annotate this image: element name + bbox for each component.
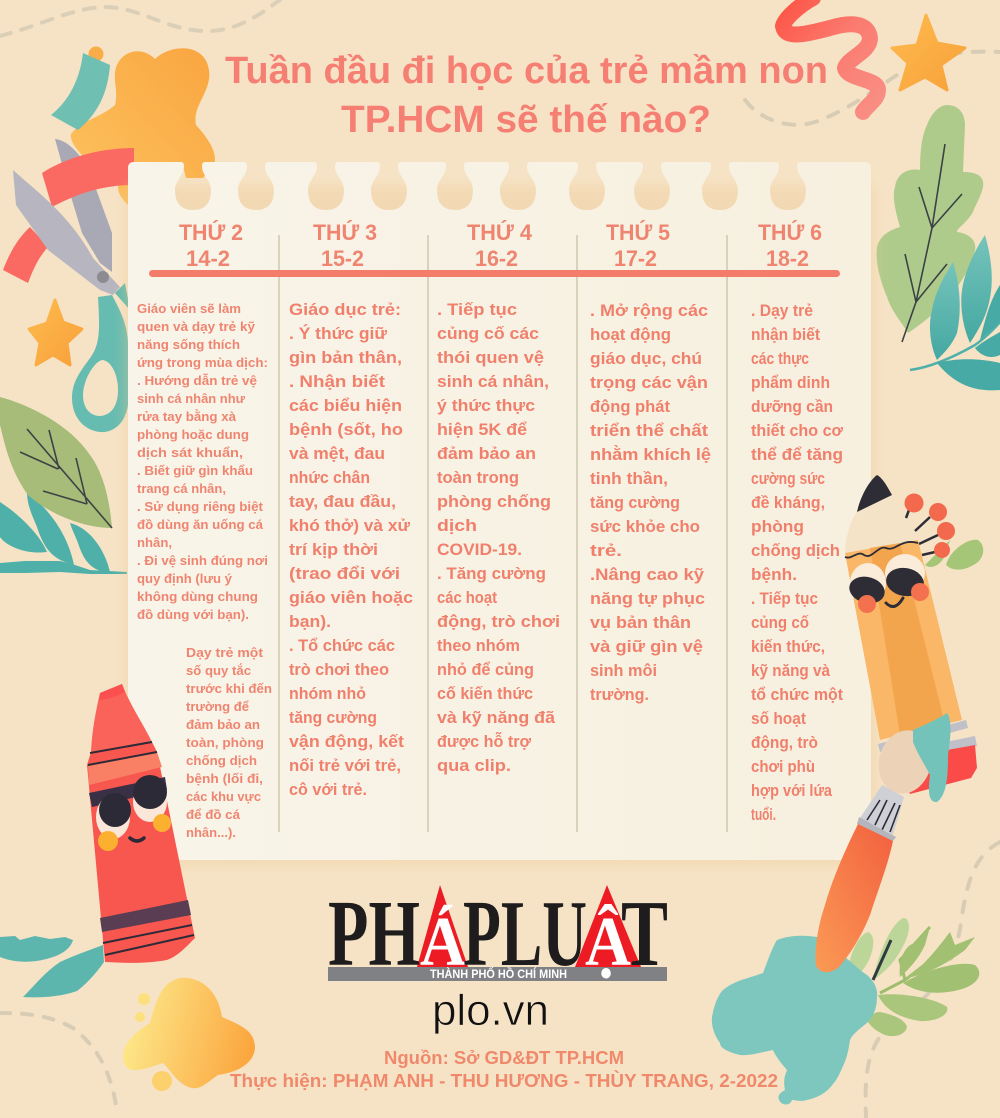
text block: Friday: bệnh. [751,565,797,584]
icon: green sprig behind pencil [925,540,983,570]
text block: Wednesday: cố kiến thức [437,684,533,703]
text block: Thursday: sức khỏe cho [590,517,700,536]
text block: Monday: nhân...). [186,825,236,840]
text block: Thursday: hoạt động [590,325,671,344]
text block: Tuesday: trí kịp thời [289,540,378,559]
text block: Tuesday: . Nhận biết [289,372,385,391]
icon: green leaf right [877,105,983,342]
icon: bottom right greenery [847,918,979,1036]
source and credits [230,1048,778,1091]
text block: Wednesday: động, trò chơi [437,612,560,631]
text block: Wednesday: . Tiếp tục [437,300,517,319]
heading: Monday: THỨ 2 [179,220,243,245]
dashed path: top left [0,0,280,36]
text block: Wednesday: sinh cá nhân, [437,372,549,391]
text block: Thursday: vụ bản thân [590,613,691,632]
text block: Friday: . Dạy trẻ [751,301,813,320]
text block: Monday: sinh cá nhân như [137,391,246,406]
text block: Friday: chống dịch [751,541,840,560]
text block: Tuesday: gìn bản thân, [289,348,402,367]
icon: teal ribbon piece [51,53,110,130]
heading: Thursday: 17-2 [614,246,657,271]
icon: scissors [3,139,134,432]
text block: Wednesday: COVID-19. [437,540,522,559]
title: TP.HCM sẽ thế nào? [341,99,711,141]
text block: Wednesday: theo nhóm [437,636,520,655]
text block: Wednesday: và kỹ năng đã [437,708,556,727]
text block: Friday: củng cố [751,613,809,632]
logo: Pháp Luật: THÀNH PHỐ HỒ CHÍ MINH [430,966,567,981]
text block: Wednesday: ý thức thực [437,396,535,415]
text block: Monday: quy định (lưu ý [137,571,233,586]
text block: Tuesday: và mệt, đau [289,444,385,463]
heading: Tuesday: 15-2 [321,246,364,271]
text block: Monday: đảm bảo an [186,717,260,732]
heading: Friday [758,220,822,271]
text block: Tuesday [289,300,413,799]
text block: Friday: kiến thức, [751,637,825,656]
text block: Tuesday: cô với trẻ. [289,780,367,799]
text block: Monday: các khu vực [186,789,261,804]
text block: Wednesday: qua clip. [437,756,511,775]
dashed path: bottom right [866,842,1000,1118]
text block: Monday: không dùng chung [137,589,258,604]
text block: Monday: ứng trong mùa dịch: [137,355,268,370]
text block: Friday: tuổi. [751,805,776,824]
text block: Monday: . Đi vệ sinh đúng nơi [137,553,268,568]
text block: Tuesday: Giáo dục trẻ: [289,300,401,319]
text block: Monday: trang cá nhân, [137,481,226,496]
text block: Thursday: sinh môi [590,661,657,680]
text block: Tuesday: nhức chân [289,468,370,487]
icon: pencil character [845,475,977,794]
text block: Monday: Dạy trẻ một [186,645,264,660]
text block: Tuesday: khó thở) và xử [289,516,411,535]
heading: Thursday [606,220,670,271]
text block: Friday: hợp với lứa [751,781,832,800]
text block: Wednesday: được hỗ trợ [437,732,532,751]
text block: Monday: đồ dùng với bạn). [137,607,249,622]
text block: Thursday: trẻ. [590,541,622,560]
text block: Friday: số hoạt [751,709,806,728]
text block: Tuesday: bạn). [289,612,331,631]
text block: Wednesday [437,300,560,775]
text block: Thursday: triển thể chất [590,421,708,440]
text block: Monday: phòng hoặc dung [137,427,249,442]
text block: Friday: tổ chức một [751,685,843,704]
logo: Pháp Luật: Á [420,904,466,981]
heading: Thursday: THỨ 5 [606,220,670,245]
icon: squiggle [783,0,878,112]
text block: Tuesday: bệnh (sốt, ho [289,420,403,439]
icon: teal paint blob [712,936,877,1104]
text block: Monday: đồ dùng ăn uống cá [137,517,264,532]
title: Tuần đầu đi học của trẻ mầm non [225,50,828,92]
text block: Thursday: .Nâng cao kỹ [590,565,705,584]
text block: Monday: quen và dạy trẻ kỹ [137,319,256,334]
text block: Monday: dịch sát khuẩn, [137,445,243,460]
logo: Pháp Luật: T [621,882,668,986]
text block: Monday: số quy tắc [186,663,251,678]
dashed path: bottom left [0,1013,117,1113]
text block: Monday: toàn, phòng [186,735,264,750]
text block: Monday: nhân, [137,535,172,550]
text block: Wednesday: các hoạt [437,588,497,607]
column dividers and header rule [149,235,840,832]
icon: crayon character [87,684,195,963]
text block: Friday: phẩm dinh [751,373,830,392]
heading: Friday: 18-2 [766,246,809,271]
heading: Monday [179,220,243,271]
text block: Monday: năng sống thích [137,337,240,352]
logo: Pháp Luật: PH [328,882,420,986]
logo: Pháp Luật: Ậ [585,904,631,981]
text block: Friday [751,301,844,824]
logo: Pháp Luật [328,882,668,986]
text block: Friday: thiết cho cơ [751,421,844,440]
text block: Friday: thể để tăng [751,445,843,464]
text block: Friday: dưỡng cần [751,397,833,416]
text block: Wednesday: phòng chống [437,492,551,511]
paper shadow [124,185,876,866]
text block: Wednesday: dịch [437,516,477,535]
text block: Tuesday: (trao đổi với [289,564,400,583]
icon: teal leaves right [910,235,1000,390]
heading: Wednesday: 16-2 [475,246,518,271]
text block: Thursday: nhằm khích lệ [590,445,711,464]
text block: Wednesday: hiện 5K để [437,420,528,439]
text block: Thursday: trường. [590,685,649,704]
heading: Monday: 14-2 [186,246,230,271]
text block: Tuesday: trò chơi theo [289,660,389,679]
heading: Wednesday: THỨ 4 [467,220,533,245]
text block: Tuesday: tăng cường [289,708,377,727]
text block: Wednesday: củng cố các [437,324,539,343]
text block: Monday: Giáo viên sẽ làm [137,301,241,316]
text block: Tuesday: . Tổ chức các [289,636,395,655]
text block: Friday: kỹ năng và [751,661,830,680]
text block: Tuesday: nhóm nhỏ [289,684,366,703]
text block: Tuesday: . Ý thức giữ [289,324,388,343]
text block: Tuesday: nối trẻ với trẻ, [289,756,401,775]
heading: Wednesday [467,220,533,271]
text block: Friday: nhận biết [751,325,820,344]
source and credits: Nguồn: Sở GD&ĐT TP.HCM [384,1048,624,1068]
icon: green leaf left [0,397,112,528]
text block: Monday: bệnh (lối đi, [186,771,263,786]
text block: Monday: . Hướng dẫn trẻ vệ [137,373,257,388]
text block: Friday: đề kháng, [751,493,825,512]
text block: Wednesday: . Tăng cường [437,564,546,583]
text block: Thursday: . Mở rộng các [590,301,708,320]
icon: teal leaves under crayon [0,936,104,997]
text block: Thursday: và giữ gìn vệ [590,637,703,656]
text block: Tuesday: giáo viên hoặc [289,588,413,607]
icon: star top right [892,15,965,90]
text block: Wednesday: toàn trong [437,468,519,487]
logo: Pháp Luật: PLU [463,882,587,986]
heading: Tuesday: THỨ 3 [313,220,377,245]
text block: Tuesday: tay, đau đầu, [289,492,396,511]
icon: star left [29,300,82,365]
text block: Friday: phòng [751,517,804,536]
text block: Monday: trước khi đến [186,681,272,696]
heading: Friday: THỨ 6 [758,220,822,245]
icon: teal leaves left [0,492,127,574]
title [225,50,828,141]
panel: notched paper [128,162,871,860]
text block: Thursday [590,301,711,704]
icon: yellow paint blob [123,978,255,1091]
text block: Thursday: tinh thần, [590,469,668,488]
text block: Thursday: giáo dục, chú [590,349,702,368]
text block: Tuesday: các biểu hiện [289,396,402,415]
text block: Monday: chống dịch [186,753,257,768]
text block: Thursday: tăng cường [590,493,680,512]
logo url: plo.vn [432,986,549,1035]
text block: Monday: để đồ cá [186,807,241,822]
text block: Wednesday: đảm bảo an [437,444,536,463]
text block: Thursday: năng tự phục [590,589,705,608]
text block: Friday: các thực [751,349,809,368]
text block: Monday [137,301,272,840]
text block: Monday: trường để [186,699,249,714]
icon: paint brush [815,713,950,972]
text block: Thursday: động phát [590,397,670,416]
text block: Tuesday: vận động, kết [289,732,404,751]
text block: Monday: . Biết giữ gìn khẩu [137,463,253,478]
source and credits: Thực hiện: PHẠM ANH - THU HƯƠNG - THÙY TRANG, 2-2022 [230,1070,778,1091]
heading: Tuesday [313,220,377,271]
dashed path: top right [745,52,1000,125]
text block: Thursday: trọng các vận [590,373,708,392]
text block: Friday: động, trò [751,733,818,752]
text block: Friday: cường sức [751,469,825,488]
text block: Wednesday: nhỏ để củng [437,660,534,679]
text block: Monday: . Sử dụng riêng biệt [137,499,264,514]
text block: Friday: . Tiếp tục [751,589,818,608]
orange paint blob [71,46,215,205]
text block: Friday: chơi phù [751,757,815,776]
text block: Monday: rửa tay bằng xà [137,409,237,424]
text block: Wednesday: thói quen vệ [437,348,544,367]
